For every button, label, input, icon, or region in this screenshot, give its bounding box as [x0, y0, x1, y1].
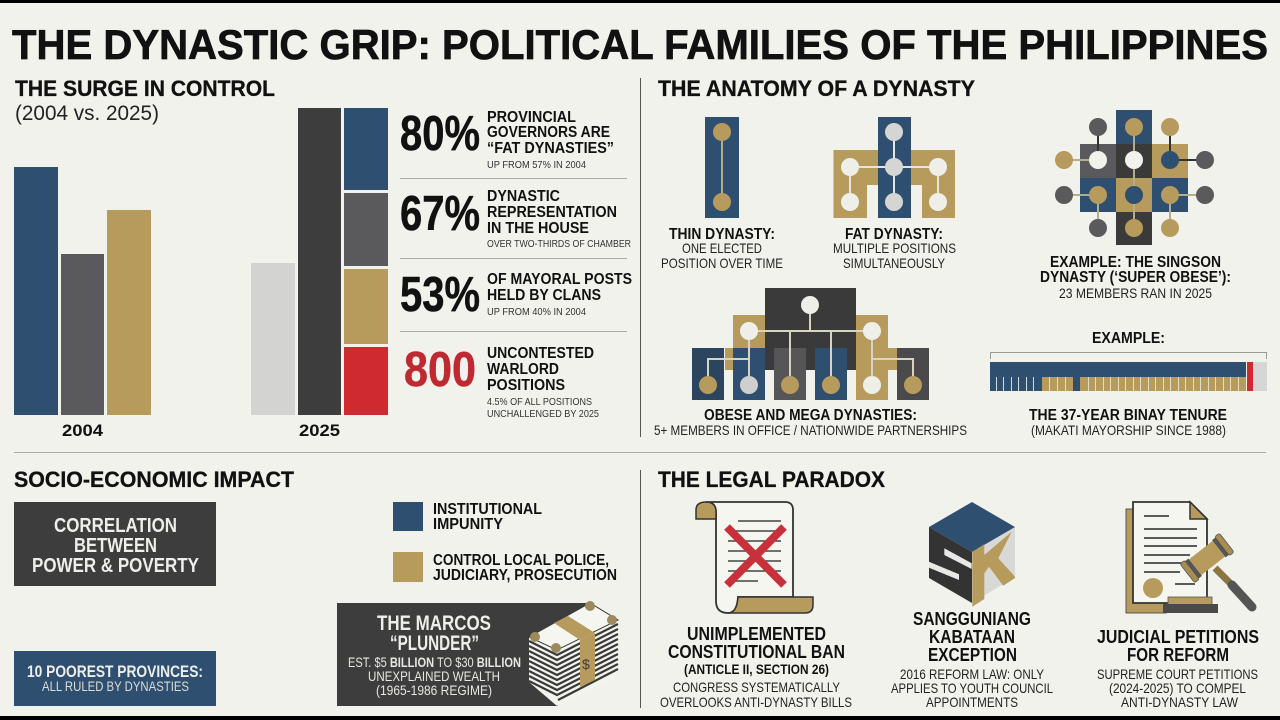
- stat: 67% house: DYNASTIC: [487, 188, 560, 205]
- text: judicial petitions for reform: ANTI-DYNASTY LAW: [1121, 694, 1239, 710]
- icon: fat dynasty: [834, 117, 955, 218]
- panel: the surge in control: [14, 76, 632, 440]
- heading: the surge in control: (2004 vs. 2025): [15, 102, 159, 125]
- callout: the marcos plunder: (1965-1986 REGIME): [376, 683, 492, 698]
- text: fat dynasty: FAT DYNASTY:: [845, 226, 943, 243]
- callout: 10 poorest provinces: [14, 651, 216, 706]
- text: thin dynasty: [661, 226, 783, 271]
- text: unimplemented constitutional ban: OVERLOOKS ANTI-DYNASTY BILLS: [660, 694, 852, 710]
- legend: institutional impunity: IMPUNITY: [433, 516, 503, 533]
- stat: 800 warlord positions: UNCONTESTED: [487, 345, 594, 362]
- icon: SK cube: [929, 502, 1015, 607]
- stat: 80% governors: 80%: [400, 107, 480, 161]
- icon: crossed-out scroll: [696, 502, 813, 613]
- callout: the marcos plunder: THE MARCOS: [377, 612, 491, 635]
- stat: 80% governors: PROVINCIAL: [487, 109, 576, 126]
- stat: 53% mayoral: OF MAYORAL POSTS: [487, 271, 632, 288]
- legend: institutional impunity: INSTITUTIONAL: [433, 501, 542, 518]
- text: fat dynasty: SIMULTANEOUSLY: [843, 255, 946, 271]
- callout: correlation between power and poverty: BETWEEN: [74, 535, 157, 557]
- heading: the surge in control: THE SURGE IN CONTROL: [15, 76, 275, 101]
- panel: socio-economic impact: [14, 467, 618, 706]
- text: unimplemented constitutional ban: [660, 624, 852, 710]
- stat: 53% mayoral: UP FROM 40% IN 2004: [487, 306, 586, 318]
- legend: institutional impunity: [393, 501, 542, 533]
- text: singson example: [1040, 254, 1231, 301]
- legend: control local police: [393, 552, 617, 584]
- heading: socio-economic impact: SOCIO-ECONOMIC IMPACT: [14, 467, 295, 492]
- text: thin dynasty: ONE ELECTED: [682, 240, 762, 256]
- text: fat dynasty: MULTIPLE POSITIONS: [833, 240, 956, 256]
- stat: 53% mayoral: [400, 268, 632, 322]
- callout: 10 poorest provinces: 10 POOREST PROVINCES:: [27, 662, 203, 681]
- stat: 67% house: REPRESENTATION: [487, 204, 617, 221]
- text: sangguniang kabataan exception: KABATAAN: [929, 627, 1015, 647]
- stat: 800 warlord positions: POSITIONS: [487, 377, 565, 394]
- stat: 67% house: OVER TWO-THIRDS OF CHAMBER: [487, 238, 631, 250]
- callout: the marcos plunder: “PLUNDER”: [390, 632, 479, 655]
- text: sangguniang kabataan exception: SANGGUNIANG: [913, 609, 1031, 629]
- callout: correlation between power and poverty: POWER & POVERTY: [32, 555, 200, 577]
- stat: 67% house: IN THE HOUSE: [487, 220, 589, 237]
- callout: correlation between power and poverty: [14, 502, 216, 586]
- text: binay tenure: [1029, 407, 1227, 438]
- stat: 800 warlord positions: [404, 343, 599, 420]
- text: binay tenure: (MAKATI MAYORSHIP SINCE 1988): [1031, 422, 1226, 438]
- icon: stack of money: $: [582, 656, 590, 672]
- text: judicial petitions for reform: [1097, 627, 1259, 710]
- text: obese and mega dynasties: [654, 407, 967, 438]
- icon: petition and gavel: [1126, 502, 1252, 613]
- callout: 10 poorest provinces: ALL RULED BY DYNASTIES: [42, 679, 189, 694]
- heading: the surge in control: [15, 76, 275, 125]
- text: sangguniang kabataan exception: 2016 REFORM LAW: ONLY: [900, 666, 1045, 682]
- icon: singson dynasty network: [1055, 110, 1214, 245]
- text: singson example: EXAMPLE: THE SINGSON: [1050, 254, 1221, 271]
- text: sangguniang kabataan exception: APPLIES TO YOUTH COUNCIL: [891, 680, 1053, 696]
- text: singson example: DYNASTY (‘SUPER OBESE’):: [1040, 269, 1231, 286]
- callout: the marcos plunder: EST. $5 BILLION TO $30 BILLION: [348, 655, 521, 670]
- stat: 800 warlord positions: WARLORD: [487, 361, 559, 378]
- stat: 53% mayoral: 53%: [400, 268, 480, 322]
- text: judicial petitions for reform: JUDICIAL PETITIONS: [1097, 627, 1259, 647]
- legend: control local police: CONTROL LOCAL POLICE,: [433, 552, 609, 569]
- icon: obese and mega dynasties: [692, 288, 929, 400]
- text: unimplemented constitutional ban: CONSTITUTIONAL BAN: [668, 642, 845, 662]
- heading: the legal paradox: THE LEGAL PARADOX: [658, 467, 885, 492]
- legend: control local police: JUDICIARY, PROSECUTION: [433, 567, 617, 584]
- text: unimplemented constitutional ban: (ANTICLE II, SECTION 26): [684, 661, 829, 677]
- text: thin dynasty: POSITION OVER TIME: [661, 255, 783, 271]
- bar chart: 2025: [251, 108, 388, 440]
- text: sangguniang kabataan exception: EXCEPTION: [928, 645, 1017, 665]
- callout: correlation between power and poverty: CORRELATION: [54, 515, 177, 537]
- icon: stack of money: [529, 601, 618, 706]
- stat: 67% house: [400, 187, 631, 250]
- heading: anatomy: THE ANATOMY OF A DYNASTY: [658, 76, 975, 101]
- stat: 67% house: 67%: [400, 187, 480, 241]
- text: example heading: EXAMPLE:: [1092, 330, 1165, 347]
- timeline: binay tenure: [990, 352, 1267, 391]
- text: judicial petitions for reform: FOR REFORM: [1127, 645, 1229, 665]
- stat: 80% governors: UP FROM 57% IN 2004: [487, 159, 586, 171]
- stat: 80% governors: GOVERNORS ARE: [487, 124, 610, 141]
- text: fat dynasty: [833, 226, 956, 271]
- panel: the legal paradox: [658, 467, 1259, 710]
- stat: 800 warlord positions: 4.5% OF ALL POSITIONS: [487, 396, 592, 408]
- text: binay tenure: THE 37-YEAR BINAY TENURE: [1029, 407, 1227, 424]
- text: sangguniang kabataan exception: APPOINTMENTS: [926, 694, 1018, 710]
- callout: the marcos plunder: UNEXPLAINED WEALTH: [368, 669, 500, 684]
- stat: 800 warlord positions: UNCHALLENGED BY 2025: [487, 408, 599, 420]
- stat: 80% governors: “FAT DYNASTIES”: [487, 140, 614, 157]
- text: judicial petitions for reform: (2024-2025) TO COMPEL: [1109, 680, 1246, 696]
- bar chart: 2004: [14, 167, 151, 440]
- stat: 80% governors: [400, 107, 614, 171]
- callout: the marcos plunder: [337, 603, 590, 706]
- text: singson example: 23 MEMBERS RAN IN 2025: [1059, 285, 1212, 301]
- bar chart: 2004: 2004: [62, 421, 104, 440]
- bar chart: 2025: 2025: [299, 421, 340, 440]
- icon: thin dynasty: [705, 117, 739, 218]
- stat: 800 warlord positions: 800: [404, 343, 476, 397]
- text: obese and mega dynasties: 5+ MEMBERS IN OFFICE / NATIONWIDE PARTNERSHIPS: [654, 422, 967, 438]
- text: obese and mega dynasties: OBESE AND MEGA DYNASTIES:: [704, 407, 917, 424]
- text: thin dynasty: THIN DYNASTY:: [669, 226, 775, 243]
- text: unimplemented constitutional ban: UNIMPLEMENTED: [687, 624, 826, 644]
- text: sangguniang kabataan exception: [891, 609, 1053, 710]
- stat: 53% mayoral: HELD BY CLANS: [487, 287, 601, 304]
- panel: the anatomy of a dynasty: [654, 76, 1267, 438]
- text: unimplemented constitutional ban: CONGRESS SYSTEMATICALLY: [673, 679, 841, 695]
